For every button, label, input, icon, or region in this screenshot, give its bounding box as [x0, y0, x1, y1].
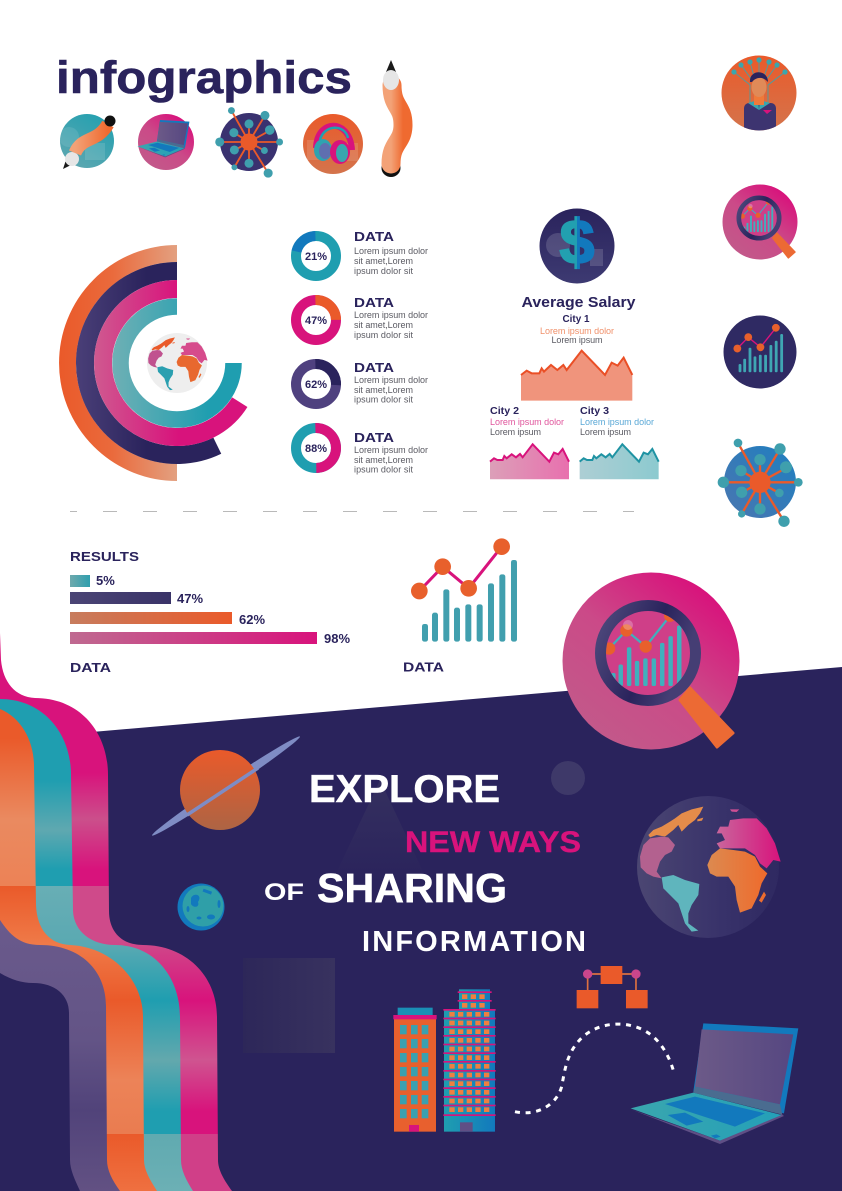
icon: network badge blue — [718, 439, 803, 527]
slogan: NEW WAYS — [405, 826, 581, 859]
donut 47% text — [354, 295, 428, 340]
city 1 label — [540, 314, 614, 345]
donut 21% text: DATA — [354, 229, 395, 244]
donut 88% text: ipsum dolor sit — [354, 464, 413, 474]
slogan: EXPLORE — [309, 768, 500, 811]
panel: average salary — [490, 208, 659, 479]
flowing ribbons — [0, 633, 232, 1191]
header block — [56, 52, 403, 178]
donut 62% text — [354, 360, 428, 404]
donut 47% text: ipsum dolor sit — [354, 330, 413, 340]
donut 21% text: ipsum dolor sit — [354, 266, 413, 276]
background navy panel — [0, 667, 842, 1191]
panel: results bars — [70, 549, 350, 675]
city 2 label: City 2 — [490, 406, 519, 417]
bar 5% — [70, 573, 115, 588]
bar 98%: 98% — [324, 631, 350, 646]
donut 21% text — [354, 229, 428, 276]
city 2 area chart — [490, 444, 569, 479]
city 1 label: City 1 — [562, 314, 590, 325]
donut 88%: 88% — [305, 443, 327, 455]
bar 98% — [70, 631, 350, 646]
donut 88% — [296, 428, 336, 468]
donut 21% text: sit amet,Lorem — [354, 256, 413, 266]
org diagram — [577, 966, 648, 1008]
faint square — [243, 958, 335, 1053]
donut 47%: 47% — [305, 315, 327, 327]
radial bar chart — [68, 254, 240, 472]
icon: chart badge — [724, 316, 796, 388]
donut 88% text: Lorem ipsum dolor — [354, 445, 428, 455]
faint triangle — [332, 780, 428, 882]
large globe — [637, 796, 781, 938]
icon: dollar badge — [540, 208, 614, 284]
bar 5%: 5% — [96, 573, 115, 588]
line and bar chart — [403, 538, 517, 674]
city 3 label — [580, 406, 654, 437]
city 1 area chart — [521, 351, 632, 401]
right column icons — [718, 56, 803, 527]
bar 62%: 62% — [239, 612, 265, 627]
donut 62% text: Lorem ipsum dolor — [354, 375, 428, 385]
city 2 label — [490, 406, 564, 437]
donut 88% text — [354, 430, 428, 474]
icon: person with nodes — [722, 56, 796, 133]
line and bar chart: DATA — [403, 660, 445, 674]
city 3 label: Lorem ipsum — [580, 427, 631, 437]
donut 47% text: DATA — [354, 295, 395, 310]
icon: dollar badge: $ — [560, 208, 594, 278]
donut 47% text: sit amet,Lorem — [354, 320, 413, 330]
title: infographics — [56, 52, 352, 103]
donut 62% — [296, 364, 336, 404]
icon: headphones badge — [303, 114, 363, 174]
arrow: dashed connection — [515, 1024, 674, 1113]
donut 62%: 62% — [305, 379, 327, 391]
donut 62% text: ipsum dolor sit — [354, 394, 413, 404]
city 2 label: Lorem ipsum — [490, 427, 541, 437]
icon: network badge — [215, 107, 283, 178]
donut 47% — [296, 300, 336, 340]
slogan: SHARING — [317, 865, 507, 911]
large magnifier badge — [562, 572, 740, 750]
city 1 label: Lorem ipsum — [552, 335, 602, 345]
bar 62% — [70, 612, 265, 627]
donut 88% text: DATA — [354, 430, 395, 445]
slogan — [264, 768, 586, 958]
icon: pencil badge — [59, 114, 116, 169]
slogan: INFORMATION — [362, 926, 586, 958]
blue planet — [178, 884, 224, 930]
panel: results bars: RESULTS — [70, 549, 139, 564]
city 1 label: Lorem ipsum dolor — [540, 326, 614, 336]
donut 21%: 21% — [305, 251, 327, 263]
donut 21% — [296, 236, 336, 276]
donut list — [296, 229, 428, 474]
icon: magnifier badge — [722, 184, 798, 260]
panel: results bars: DATA — [70, 660, 112, 675]
city 3 area chart — [580, 444, 659, 479]
buildings — [393, 989, 496, 1132]
faint sphere — [551, 761, 585, 795]
city 2 label: Lorem ipsum dolor — [490, 417, 564, 427]
bar 47% — [70, 591, 203, 606]
donut 62% text: sit amet,Lorem — [354, 385, 413, 395]
icon: tall pencil — [382, 60, 403, 177]
donut 21% text: Lorem ipsum dolor — [354, 246, 428, 256]
small globe — [147, 333, 208, 393]
city 3 label: Lorem ipsum dolor — [580, 417, 654, 427]
city 3 label: City 3 — [580, 406, 610, 417]
laptop — [631, 1023, 798, 1144]
slogan: OF — [264, 879, 304, 906]
donut 47% text: Lorem ipsum dolor — [354, 310, 428, 320]
donut 62% text: DATA — [354, 360, 395, 375]
bar 47%: 47% — [177, 591, 203, 606]
ringed planet — [150, 733, 302, 839]
donut 88% text: sit amet,Lorem — [354, 455, 413, 465]
heading: Average Salary — [522, 294, 636, 311]
icon: laptop badge — [137, 114, 194, 170]
